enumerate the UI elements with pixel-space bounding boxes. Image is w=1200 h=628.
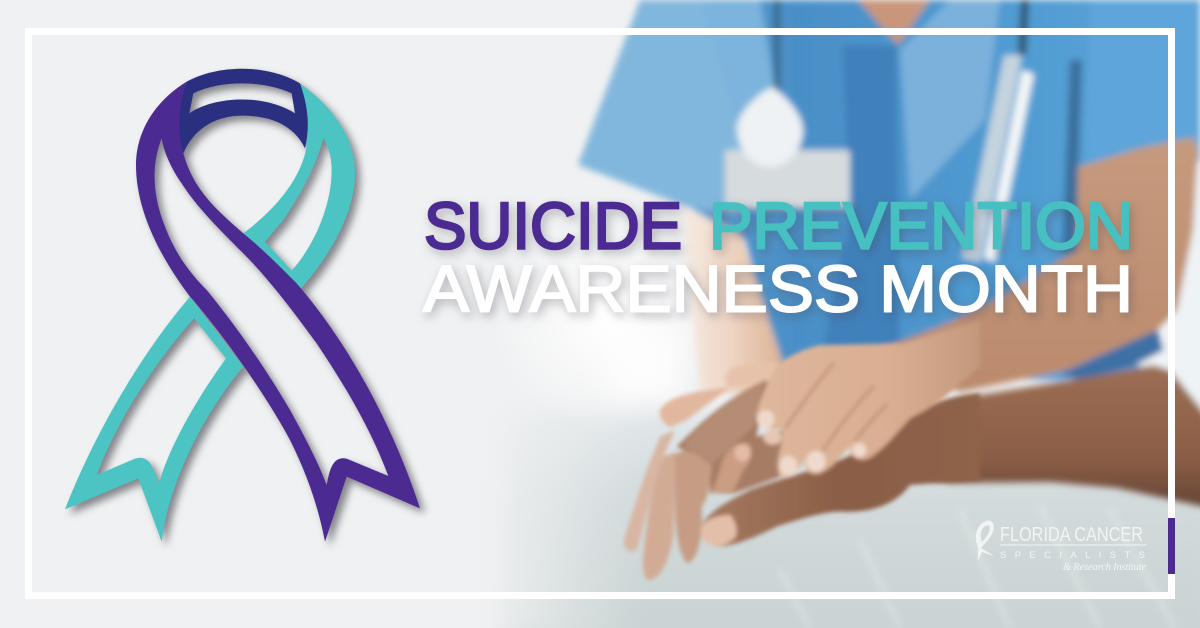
sleeve cuff <box>1137 350 1172 370</box>
patient finger b <box>643 452 677 580</box>
title word: suicide: SUICIDE <box>424 188 682 262</box>
patient upper pale fingers <box>726 362 778 387</box>
thumb nail <box>701 515 737 547</box>
nurse nails <box>757 410 774 428</box>
nurse hand <box>757 320 980 477</box>
patient hand back <box>677 380 783 493</box>
stethoscope head <box>737 87 803 167</box>
ribbon teal lower tail <box>65 297 243 542</box>
ribbon navy top loop <box>179 69 308 153</box>
logo name: FLORIDA CANCER <box>1000 524 1143 546</box>
white area outside frame at right <box>1137 165 1200 425</box>
logo tagline: & Research Institute <box>1063 562 1146 573</box>
patient forearm <box>900 365 1200 508</box>
dark scrub centre <box>820 45 900 360</box>
logo specialists: SPECIALISTS <box>1000 550 1145 561</box>
ribbon teal upper band <box>243 83 355 293</box>
blue under arm <box>1060 330 1164 380</box>
ribbon purple band <box>136 82 420 542</box>
nurse finger creases <box>785 363 887 450</box>
patient finger a <box>675 451 712 563</box>
title line: awareness month: AWARENESS MONTH <box>423 252 1133 326</box>
pens <box>962 55 1022 262</box>
hands <box>624 320 980 580</box>
logo icon <box>976 520 994 561</box>
patient thumb and wrist <box>701 393 980 547</box>
title word: prevention: PREVENTION <box>709 188 1133 262</box>
left sleeve <box>578 0 770 215</box>
patient inner finger <box>712 443 751 493</box>
logo divider <box>1000 544 1147 546</box>
blanket <box>470 330 1200 628</box>
stethoscope tube <box>774 0 780 90</box>
badge <box>725 150 850 208</box>
blanket folds <box>780 505 1175 628</box>
patient finger c <box>624 430 675 551</box>
purple frame accent <box>1168 518 1175 574</box>
scrubs torso <box>578 0 1200 380</box>
nurse left arm <box>683 207 782 400</box>
neck <box>858 0 930 45</box>
nurse right arm <box>880 137 1198 392</box>
